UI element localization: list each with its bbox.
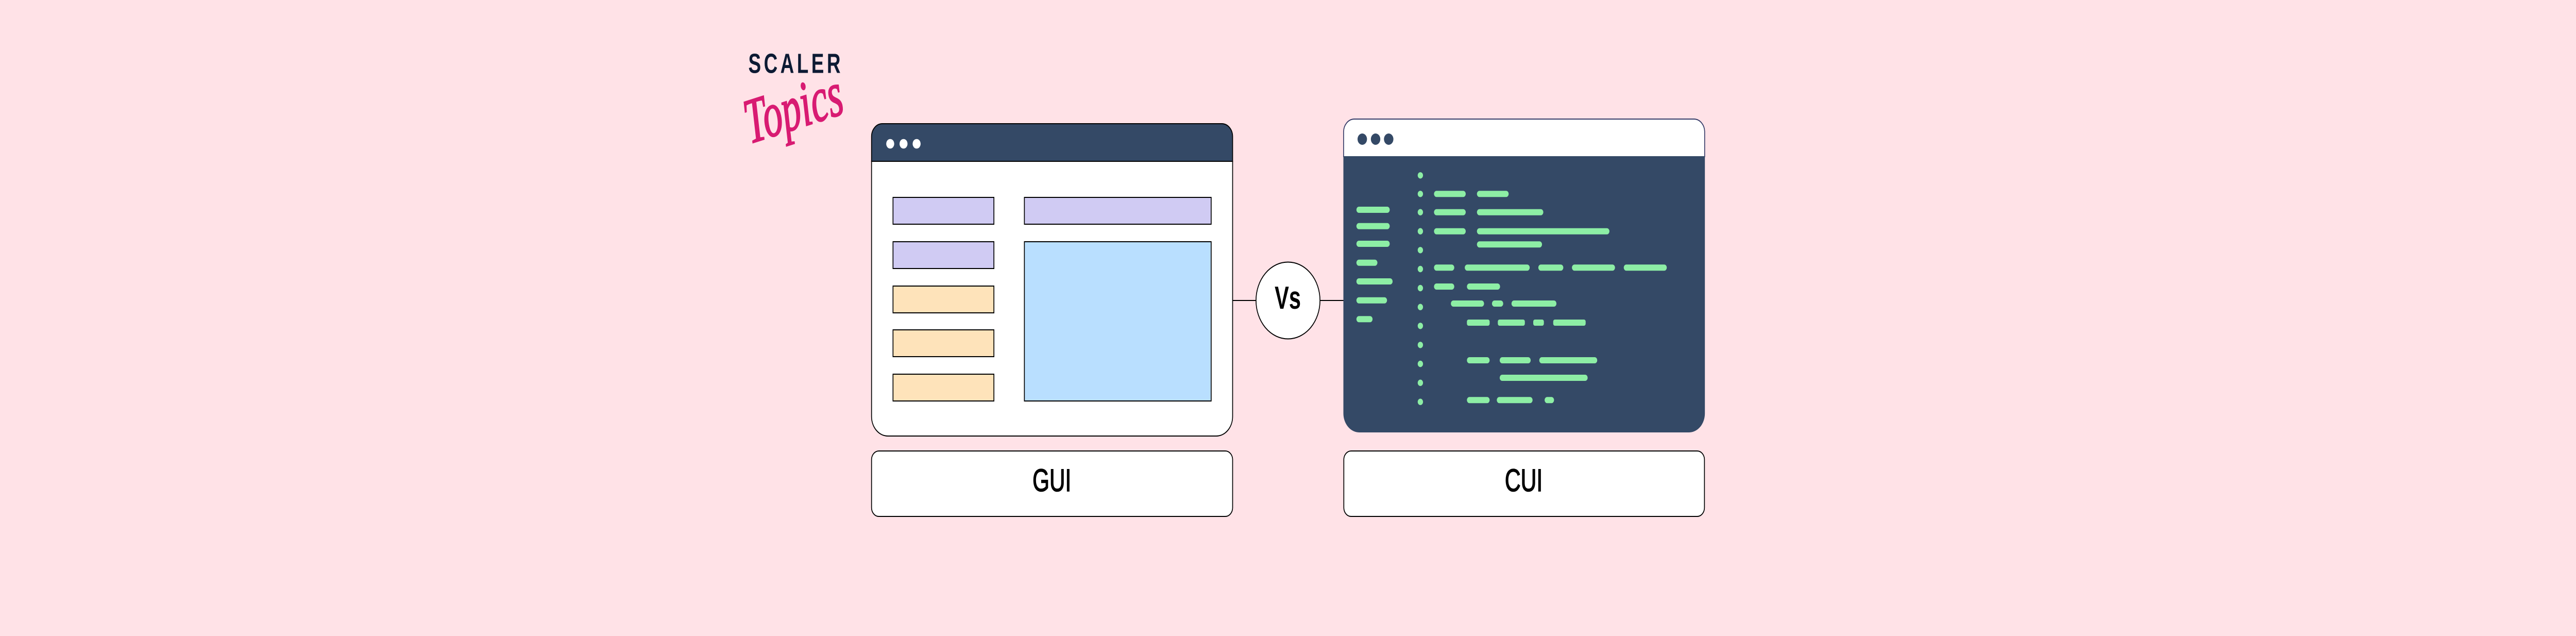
GUI menu items purple: [893, 197, 994, 269]
CUI code lines: [1434, 191, 1667, 403]
logo script: Topics: Topics: [737, 58, 849, 157]
GUI main content area: [1024, 242, 1211, 401]
CUI line-number dots: [1418, 172, 1423, 405]
label text: GUI: GUI: [1032, 463, 1071, 498]
panel: GUI window: [872, 124, 1232, 436]
label box: GUI: [872, 451, 1232, 516]
CUI window dots: [1358, 133, 1394, 145]
connector line between windows: [1232, 300, 1344, 301]
CUI title bar: [1344, 119, 1705, 157]
GUI menu items orange: [893, 286, 994, 401]
GUI top bar content: [1024, 197, 1211, 224]
panel: CUI window: [1344, 119, 1705, 432]
CUI terminal body: [1344, 156, 1705, 432]
GUI window dots: [886, 139, 921, 148]
GUI window body: [872, 161, 1232, 436]
GUI title bar: [872, 124, 1232, 161]
Vs badge: [1256, 262, 1320, 339]
label text: CUI: CUI: [1505, 463, 1543, 498]
label box: CUI: [1344, 451, 1704, 516]
CUI left column lines: [1357, 207, 1393, 322]
logo: Scaler Topics: [737, 47, 849, 157]
Vs text: Vs: [1275, 280, 1301, 316]
logo wordmark: SCALER: SCALER: [748, 47, 843, 79]
